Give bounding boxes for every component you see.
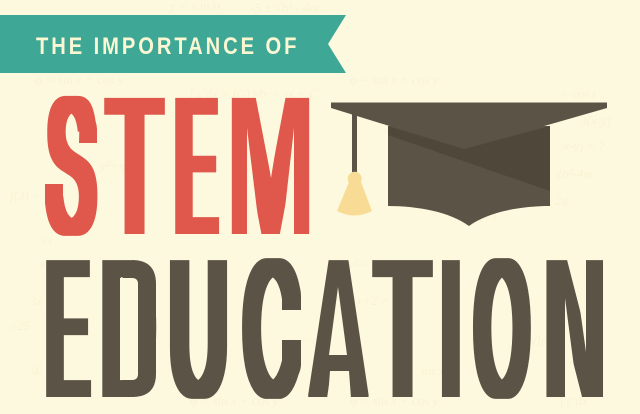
heading: STEM	[48, 56, 311, 276]
math formula background pattern: y²+x²	[98, 158, 129, 173]
EDUCATION letter shape refinements	[120, 259, 586, 398]
math formula background pattern: 3x+2 = 2x	[349, 293, 405, 308]
math formula background pattern: x²+y² = ?	[39, 256, 90, 271]
math formula background pattern: ①	[30, 363, 43, 378]
math formula background pattern: x²+y² = ?	[329, 256, 380, 271]
heading: EDUCATION	[47, 218, 604, 414]
banner text: THE IMPORTANCE OF	[36, 32, 296, 59]
cap base	[388, 126, 550, 226]
math formula background pattern: φ = sin x + cos y	[350, 72, 439, 87]
math formula background pattern: φ = sin x + cos y	[190, 393, 279, 408]
icon: graduation cap	[331, 102, 607, 226]
math formula background pattern: ∫ c'dx	[559, 393, 588, 409]
math formula background pattern: √b²-4ac	[555, 166, 596, 181]
cap top board	[331, 102, 607, 149]
math formula background pattern: √x	[40, 233, 53, 248]
math formula background pattern: |x-y| = ?	[560, 138, 605, 153]
heading: STEM: T	[108, 57, 161, 274]
math formula background pattern: 2a	[555, 193, 568, 208]
tassel cord	[352, 113, 357, 173]
STEM letter shape refinements	[45, 97, 294, 235]
math formula background pattern: b ± √b²-4ac	[290, 333, 351, 348]
math formula background pattern: sin x	[420, 363, 444, 378]
math formula background pattern: √25	[10, 318, 31, 333]
math formula background pattern: f(3) =	[10, 188, 41, 203]
math formula background pattern: φ = sin x + cos y	[350, 393, 439, 408]
cap shadow	[388, 126, 550, 191]
heading: STEM: E	[176, 57, 216, 275]
math formula background pattern: ∫ c'dx = ∫(-1)dx = -x + C	[189, 86, 318, 102]
math formula background pattern: √3	[560, 278, 574, 293]
math formula background pattern: 3x	[29, 293, 42, 308]
tassel	[337, 172, 372, 216]
math formula background pattern: φ = sin x + cos y	[35, 72, 124, 87]
ribbon banner	[0, 15, 346, 73]
math formula background pattern: √b²-4ac	[530, 333, 571, 348]
heading: STEM: M	[230, 56, 311, 275]
math formula background pattern: 3x+1	[469, 210, 498, 225]
math formula background pattern: = cos t	[560, 86, 597, 101]
heading: STEM: S	[48, 57, 95, 276]
math formula background pattern: 3(x-y)	[579, 113, 611, 128]
math formula background pattern: -5 ± √b² - 4ac	[250, 0, 322, 15]
